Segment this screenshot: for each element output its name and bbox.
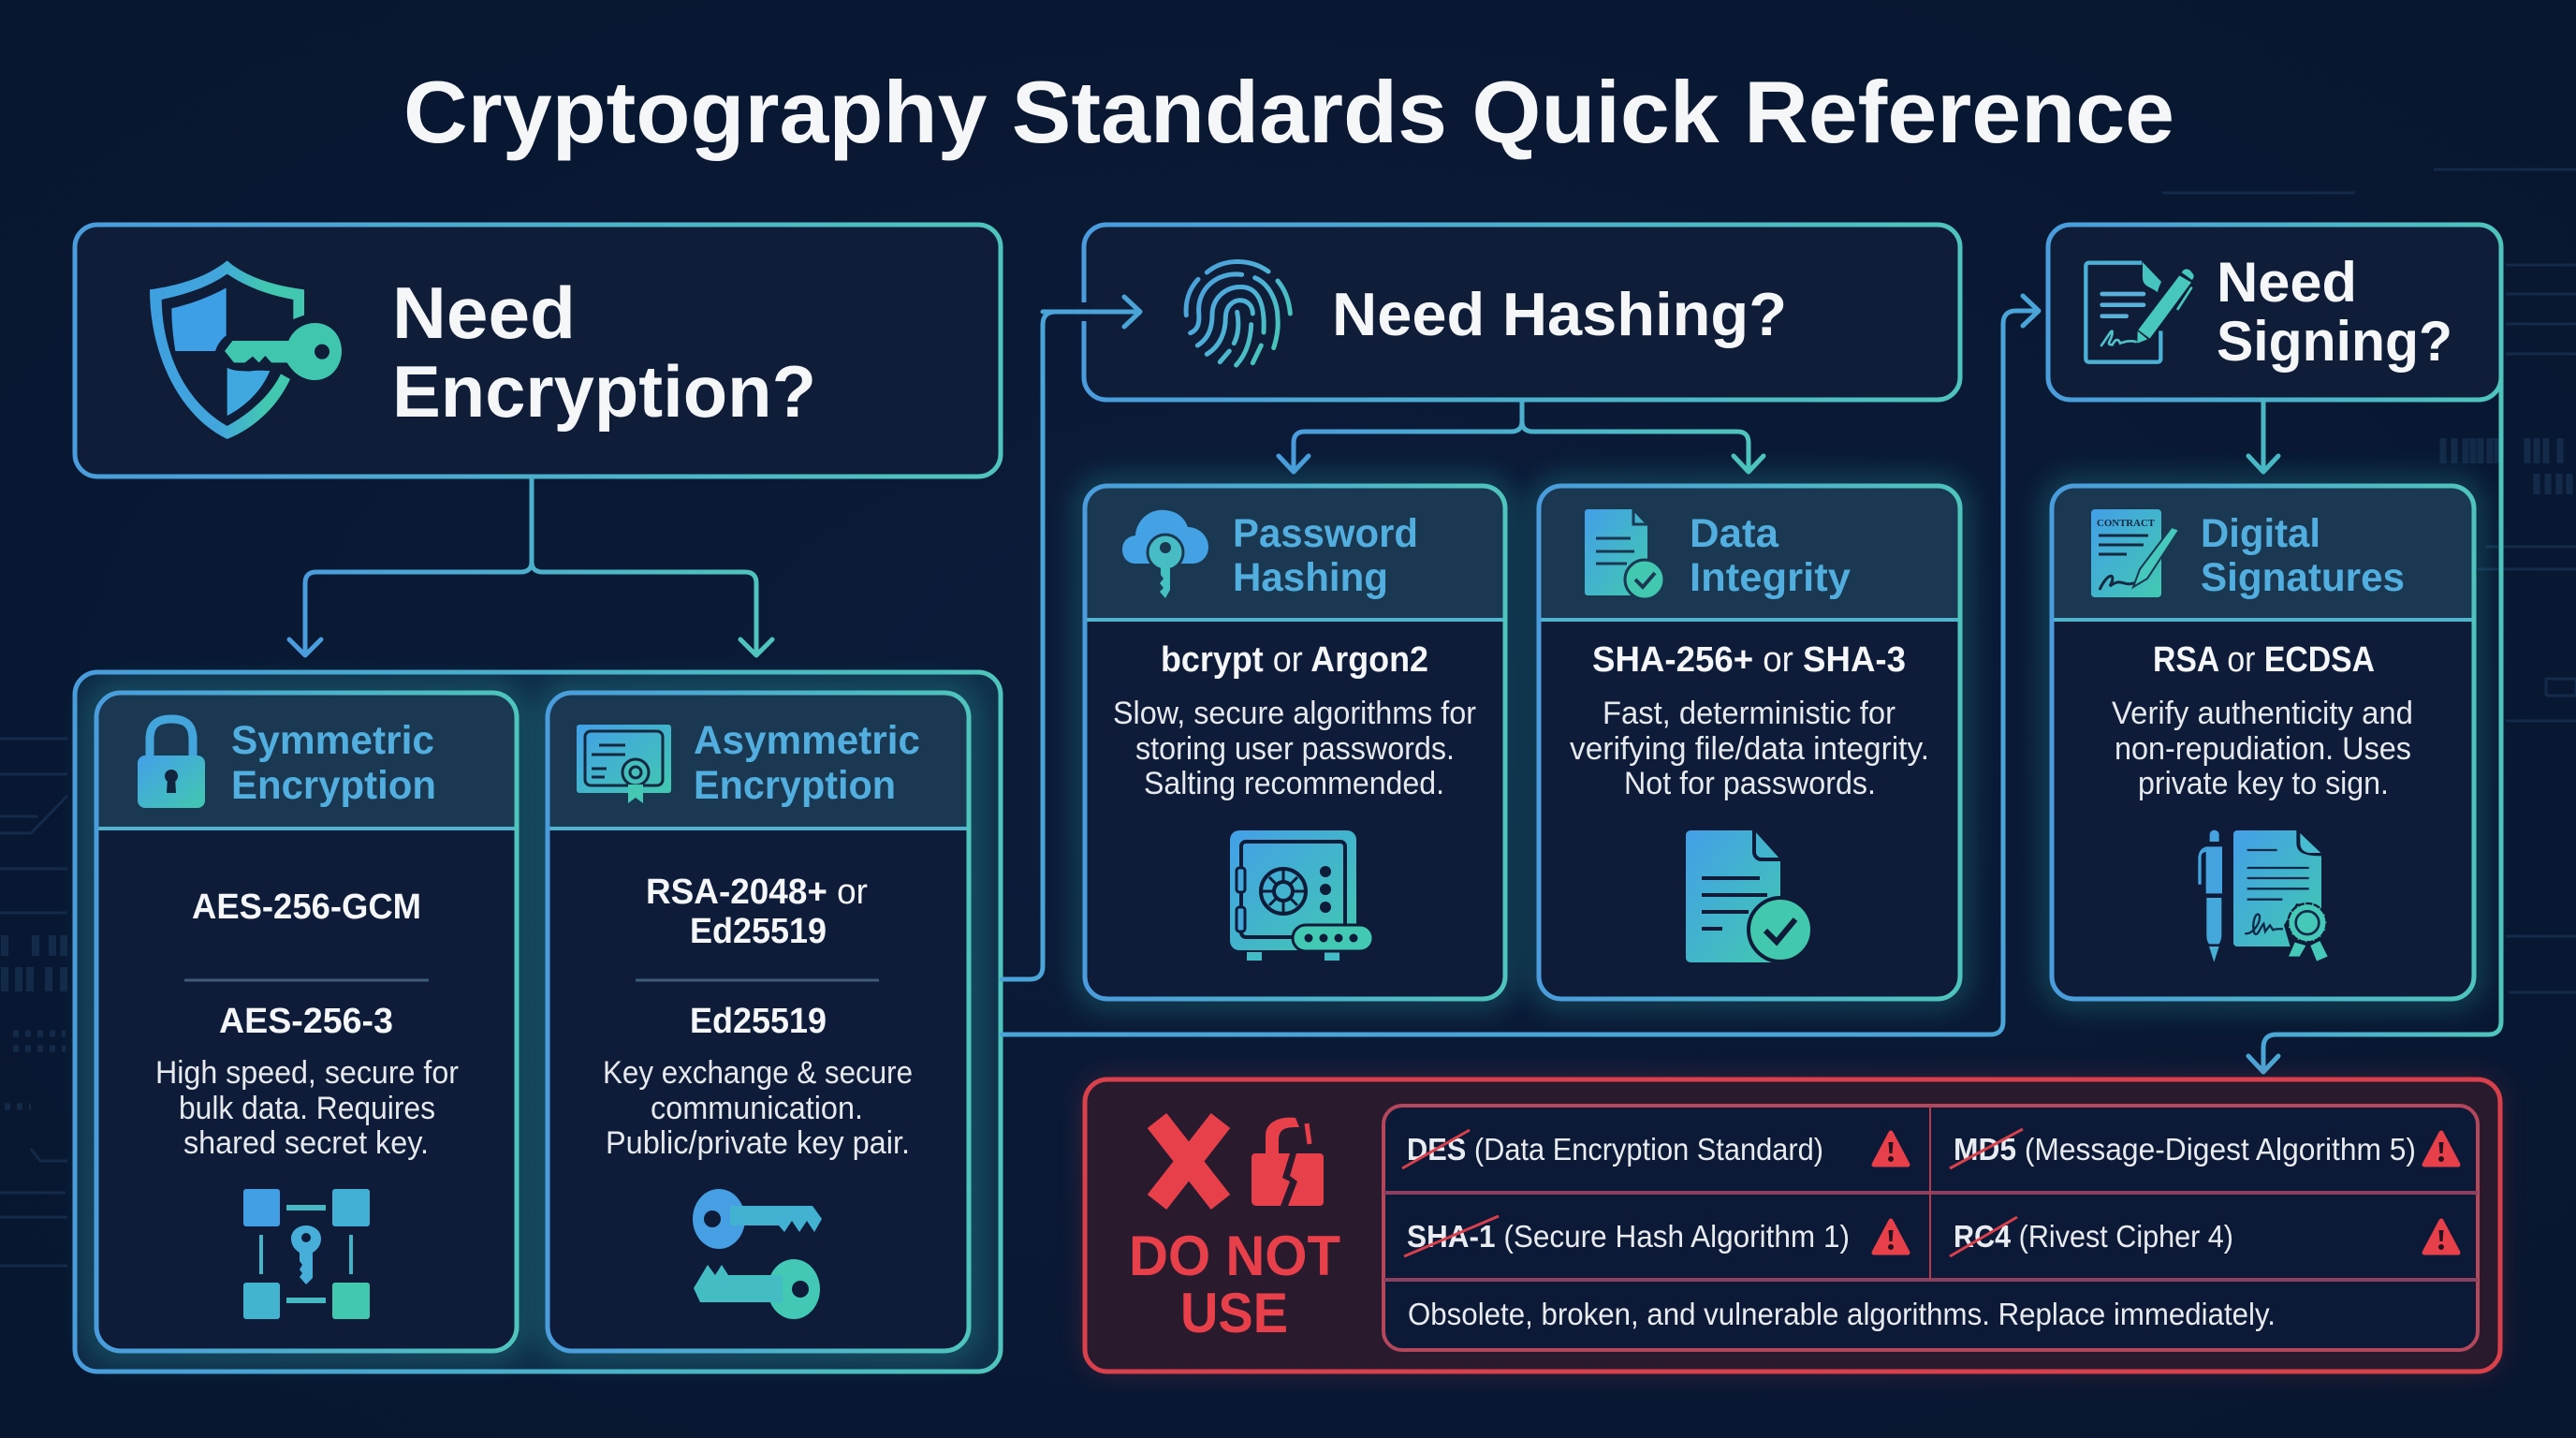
description xyxy=(1570,696,1929,801)
heading: Encryption xyxy=(694,763,896,808)
connector: signing to do not use xyxy=(2248,379,2501,1072)
description: verifying file/data integrity. xyxy=(1570,731,1929,767)
heading: Symmetric xyxy=(231,718,434,763)
description: private key to sign. xyxy=(2138,766,2389,801)
icon: pen and sealed document xyxy=(2198,830,2328,962)
icon: cloud key xyxy=(1122,510,1208,598)
algorithm: RSA-2048+ or xyxy=(646,873,868,912)
warning heading xyxy=(1129,1225,1340,1344)
heading: Encryption? xyxy=(392,350,816,433)
icon: padlock xyxy=(138,719,205,808)
heading: Need Hashing? xyxy=(1332,280,1787,348)
algorithm: SHA-256+ or SHA-3 xyxy=(1592,640,1906,680)
warning heading: DO NOT xyxy=(1129,1225,1340,1287)
panel: digital signatures xyxy=(2052,486,2474,999)
algorithm: bcrypt or Argon2 xyxy=(1161,640,1428,680)
heading xyxy=(392,271,816,433)
icon: signed document xyxy=(2086,262,2194,362)
panel: encryption container xyxy=(75,672,1001,1372)
icon: fingerprint xyxy=(1186,261,1290,365)
panel: need encryption xyxy=(75,225,1001,477)
heading xyxy=(1233,511,1418,600)
description: Key exchange & secure xyxy=(603,1055,913,1091)
algorithm: AES-256-GCM xyxy=(192,888,421,927)
algorithm xyxy=(646,873,868,951)
description: Salting recommended. xyxy=(1144,766,1444,801)
icon: document check xyxy=(1585,509,1664,599)
algorithm: AES-256-3 xyxy=(219,1002,393,1041)
description: Not for passwords. xyxy=(1624,766,1876,801)
arrow: signing to signatures xyxy=(2248,400,2278,472)
icon: safe xyxy=(1230,830,1373,961)
connector: encryption to hashing xyxy=(1002,297,1140,979)
heading: Digital xyxy=(2201,511,2320,556)
icon: contract and pen xyxy=(2091,509,2179,597)
heading: Encryption xyxy=(231,763,436,808)
heading: Password xyxy=(1233,511,1418,556)
heading: Need xyxy=(392,271,576,354)
panel: data integrity xyxy=(1539,486,1960,999)
heading xyxy=(2201,511,2405,600)
icon: warning xyxy=(2424,1221,2458,1253)
panel: do not use xyxy=(1085,1079,2500,1372)
table: deprecated algorithms xyxy=(1383,1106,2478,1350)
description xyxy=(603,1055,913,1161)
description: Public/private key pair. xyxy=(606,1125,910,1161)
heading: Need xyxy=(2217,251,2357,314)
heading: Signing? xyxy=(2217,310,2452,373)
heading: Data xyxy=(1690,511,1779,556)
item: RC4: RC4 (Rivest Cipher 4) xyxy=(1954,1219,2233,1254)
icon: contract and pen: CONTRACT xyxy=(2097,518,2156,529)
icon: certificate xyxy=(577,725,671,803)
description: Verify authenticity and xyxy=(2112,696,2413,731)
description: storing user passwords. xyxy=(1135,731,1455,767)
heading xyxy=(694,718,920,808)
algorithm: Ed25519 xyxy=(690,1002,827,1041)
description xyxy=(2112,696,2413,801)
panel: password hashing xyxy=(1085,486,1505,999)
panel: asymmetric encryption xyxy=(548,693,969,1351)
panel: symmetric encryption xyxy=(96,693,517,1351)
item: SHA-1: SHA-1 (Secure Hash Algorithm 1) xyxy=(1407,1219,1850,1254)
heading: Signatures xyxy=(2201,555,2405,600)
description: non-repudiation. Uses xyxy=(2115,731,2411,767)
item: DES: DES (Data Encryption Standard) xyxy=(1407,1132,1823,1167)
heading xyxy=(1690,511,1851,600)
connector: encryption to signing xyxy=(1002,296,2039,1034)
description: communication. xyxy=(651,1091,863,1126)
warning note: Obsolete, broken, and vulnerable algorithms. Replace immediately. xyxy=(1408,1297,2276,1331)
description xyxy=(155,1055,459,1161)
description: Fast, deterministic for xyxy=(1603,696,1895,731)
icon: key pair xyxy=(693,1189,822,1319)
panel: need signing xyxy=(2048,225,2501,400)
connector: encryption branches xyxy=(289,477,772,655)
icon: warning xyxy=(2424,1133,2458,1165)
heading xyxy=(2217,251,2452,373)
heading: Asymmetric xyxy=(694,718,920,763)
algorithm: Ed25519 xyxy=(690,912,827,951)
description: High speed, secure for xyxy=(155,1055,459,1091)
description: shared secret key. xyxy=(183,1125,429,1161)
icon: broken padlock xyxy=(1251,1118,1324,1206)
connector: hashing branches xyxy=(1279,400,1764,472)
icon: warning xyxy=(1874,1133,1908,1165)
heading: Integrity xyxy=(1690,555,1851,600)
heading: Hashing xyxy=(1233,555,1388,600)
description xyxy=(1113,696,1476,801)
icon: x mark xyxy=(1157,1121,1221,1202)
icon: shield and key xyxy=(150,260,342,439)
icon: warning xyxy=(1874,1221,1908,1253)
icon: document check large xyxy=(1686,830,1812,962)
warning heading: USE xyxy=(1180,1282,1288,1344)
title: Cryptography Standards Quick Reference xyxy=(403,63,2174,161)
description: Slow, secure algorithms for xyxy=(1113,696,1476,731)
heading xyxy=(231,718,436,808)
panel: need hashing xyxy=(1043,225,1960,400)
algorithm: RSA or ECDSA xyxy=(2153,640,2375,680)
description: bulk data. Requires xyxy=(179,1091,435,1126)
icon: key blocks xyxy=(243,1189,370,1319)
item: MD5: MD5 (Message-Digest Algorithm 5) xyxy=(1954,1132,2416,1167)
